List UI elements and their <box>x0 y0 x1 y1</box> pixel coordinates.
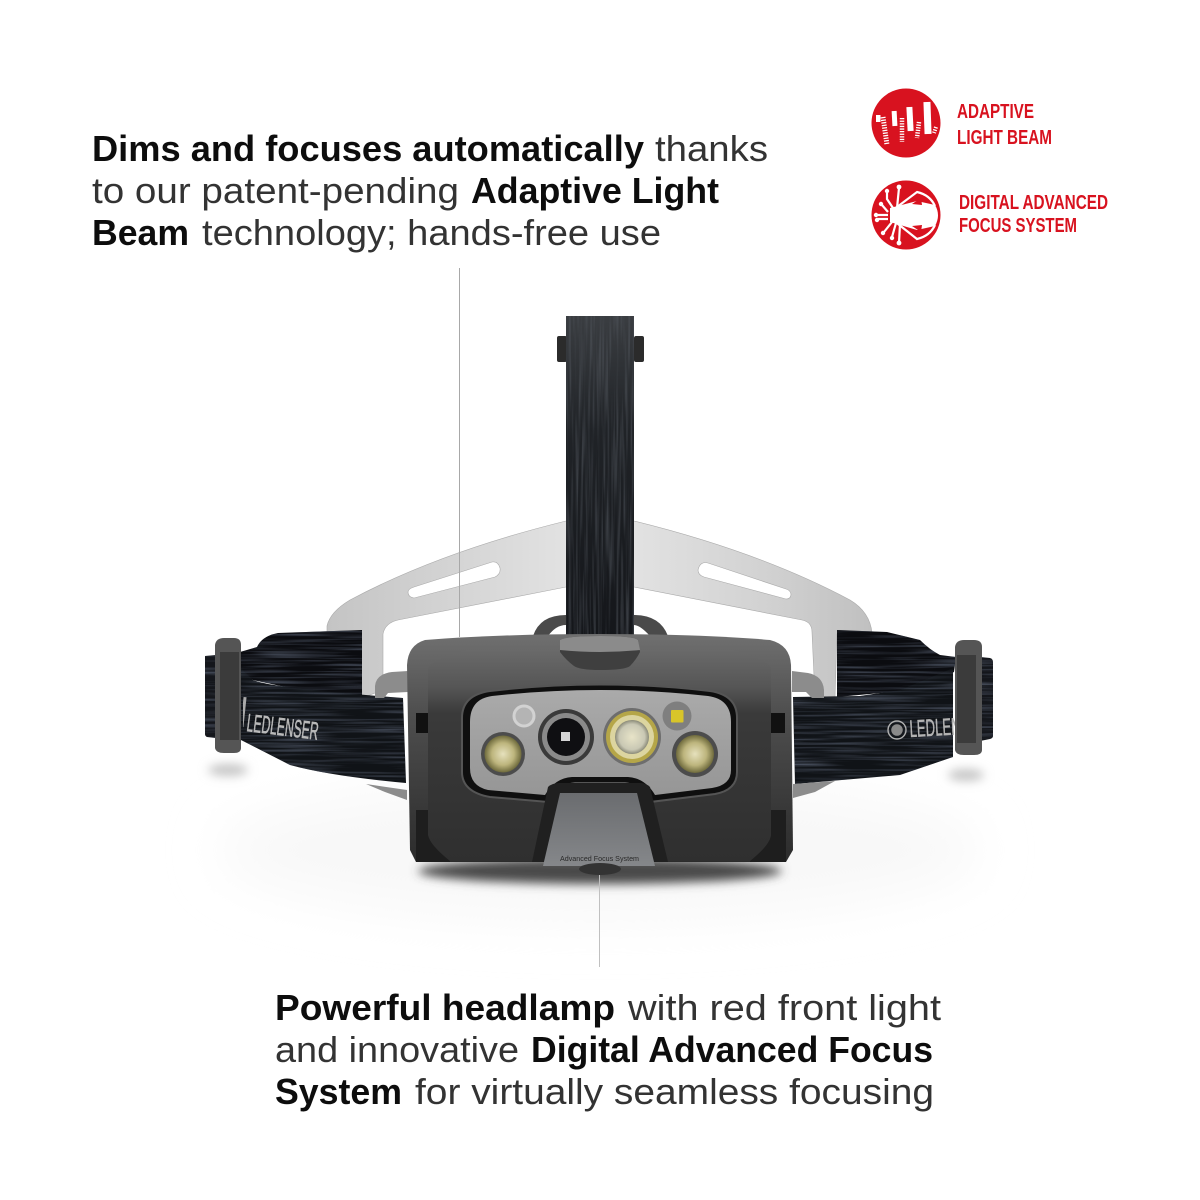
right buckle <box>955 640 982 755</box>
rear loop behind strap <box>533 615 668 636</box>
logo: right strap: LEDLENSER <box>909 712 988 743</box>
sensor camera <box>538 709 594 765</box>
red front light <box>514 706 534 726</box>
body text: digital advanced focus: System <box>275 1071 402 1112</box>
body text: digital advanced focus <box>275 987 941 1112</box>
label: adaptive light beam: ADAPTIVE <box>957 101 1034 123</box>
logo: left strap <box>243 697 318 740</box>
feature badge: digital advanced focus system <box>872 180 1108 250</box>
left LED <box>481 732 525 776</box>
floor shadow <box>208 764 984 920</box>
connector line: bottom <box>599 875 600 967</box>
body text: digital advanced focus: with red front light <box>627 987 941 1028</box>
indicator LED <box>662 702 692 730</box>
top strap <box>557 316 644 641</box>
right LED <box>672 731 718 777</box>
headlamp <box>205 316 993 875</box>
label: adaptive light beam: LIGHT BEAM <box>957 127 1052 149</box>
left buckle <box>215 638 241 753</box>
heading: adaptive light beam text: Beam <box>92 212 189 253</box>
body text: digital advanced focus: and innovative <box>275 1029 519 1070</box>
icon: adaptive light beam <box>872 88 940 158</box>
heading: adaptive light beam text: Dims and focuses automatically <box>92 128 644 169</box>
side connectors <box>366 671 835 800</box>
label: digital advanced focus system <box>959 192 1108 237</box>
left strap <box>205 630 406 783</box>
body text: digital advanced focus: Digital Advanced Focus <box>531 1029 933 1070</box>
focus slider tab <box>532 783 668 866</box>
heading: adaptive light beam text: thanks <box>655 128 768 169</box>
label: adaptive light beam <box>957 101 1052 149</box>
light panel <box>470 690 731 795</box>
connector line: top <box>459 268 460 637</box>
focus slider tab: Advanced Focus System <box>560 856 639 863</box>
heading: adaptive light beam text <box>92 128 768 253</box>
right strap <box>793 630 993 784</box>
logo: right strap <box>887 718 955 740</box>
heading: adaptive light beam text: technology; hands-free use <box>202 212 661 253</box>
focus knob <box>579 863 621 875</box>
light panel frame <box>462 684 737 802</box>
heading: adaptive light beam text: Adaptive Light <box>471 170 719 211</box>
body text: digital advanced focus: for virtually seamless focusing <box>415 1071 934 1112</box>
main LED <box>603 708 661 766</box>
body text: digital advanced focus: Powerful headlamp <box>275 987 615 1028</box>
power button <box>560 636 640 670</box>
lamp housing <box>407 634 793 875</box>
heading: adaptive light beam text: to our patent-pending <box>92 170 459 211</box>
label: digital advanced focus system: FOCUS SYSTEM <box>959 215 1077 237</box>
left strap: LEDLENSER <box>245 709 320 746</box>
feature badge: adaptive light beam <box>872 88 1052 158</box>
label: digital advanced focus system: DIGITAL ADVANCED <box>959 192 1108 214</box>
icon: digital advanced focus <box>872 180 940 250</box>
headband bracket <box>327 521 872 698</box>
